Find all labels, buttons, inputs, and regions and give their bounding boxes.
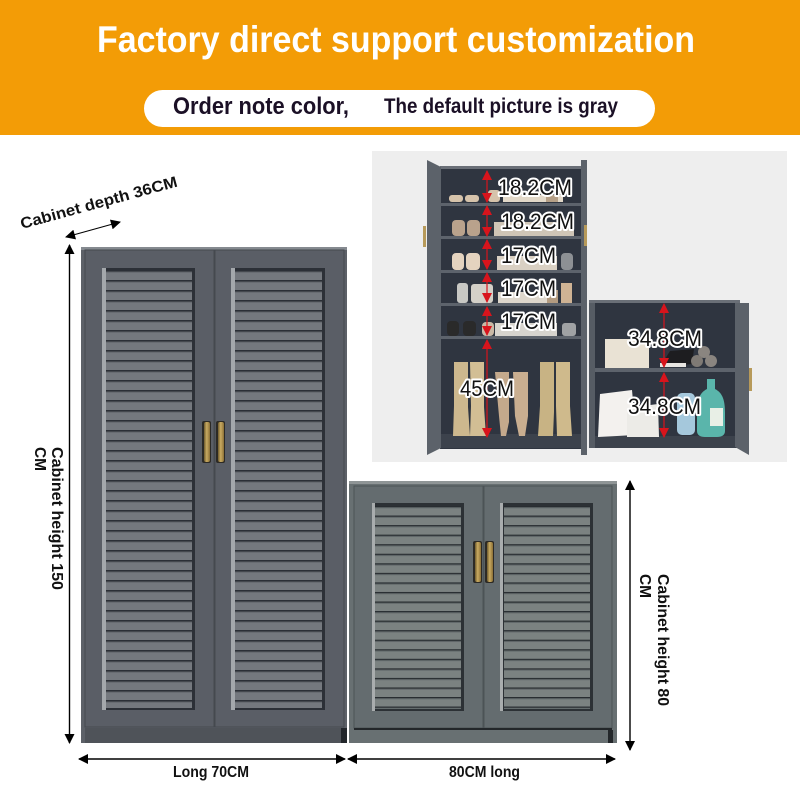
note pill: Order note color, [173,93,349,120]
tall open cabinet [423,160,587,455]
tall cabinet height label: CM [31,447,48,471]
arrow: short cabinet height [629,481,631,750]
compartment measurements: 34.8CM [628,394,701,419]
compartment measurements: 17CM [501,243,556,268]
short cabinet length label: 80CM long [449,764,520,781]
short cabinet height label: Cabinet height 80 [654,574,671,706]
boots [453,362,572,436]
left louver panel [372,503,464,711]
gold handles [202,421,225,463]
title: Factory direct support customization [97,19,695,60]
arrow: depth [66,222,120,237]
arrow: short cabinet length [348,758,615,760]
compartment measurements [460,175,702,419]
right louver panel [500,503,593,711]
note pill: The default picture is gray [384,95,618,118]
storage box and rolled towels [605,339,717,368]
depth label: Cabinet depth 36CM [19,174,179,233]
left louver panel [102,268,195,710]
tall louvered cabinet [81,247,347,743]
tall cabinet height label: Cabinet height 150 [48,447,65,590]
short cabinet height label [636,574,671,706]
compartment measurements: 18.2CM [498,175,572,200]
bags and bottles [598,379,725,437]
red height arrows [487,171,664,437]
small open cabinet [589,300,752,455]
tall cabinet height label [31,447,65,590]
compartment measurements: 45CM [460,376,514,401]
right louver panel [231,268,325,710]
compartment measurements: 34.8CM [628,326,702,351]
compartment measurements: 17CM [501,309,556,334]
arrow: tall cabinet length [79,758,345,760]
short louvered cabinet [349,481,617,743]
shoes [447,190,576,336]
tall cabinet length label: Long 70CM [173,764,249,781]
arrow: tall cabinet height [68,245,70,743]
orange header banner [0,0,800,135]
panel: interior photo of cabinets [372,151,787,462]
compartment measurements: 17CM [501,276,556,301]
compartment measurements: 18.2CM [501,209,574,234]
note pill [144,90,655,127]
short cabinet height label: CM [636,574,653,598]
gold handles [473,541,494,583]
